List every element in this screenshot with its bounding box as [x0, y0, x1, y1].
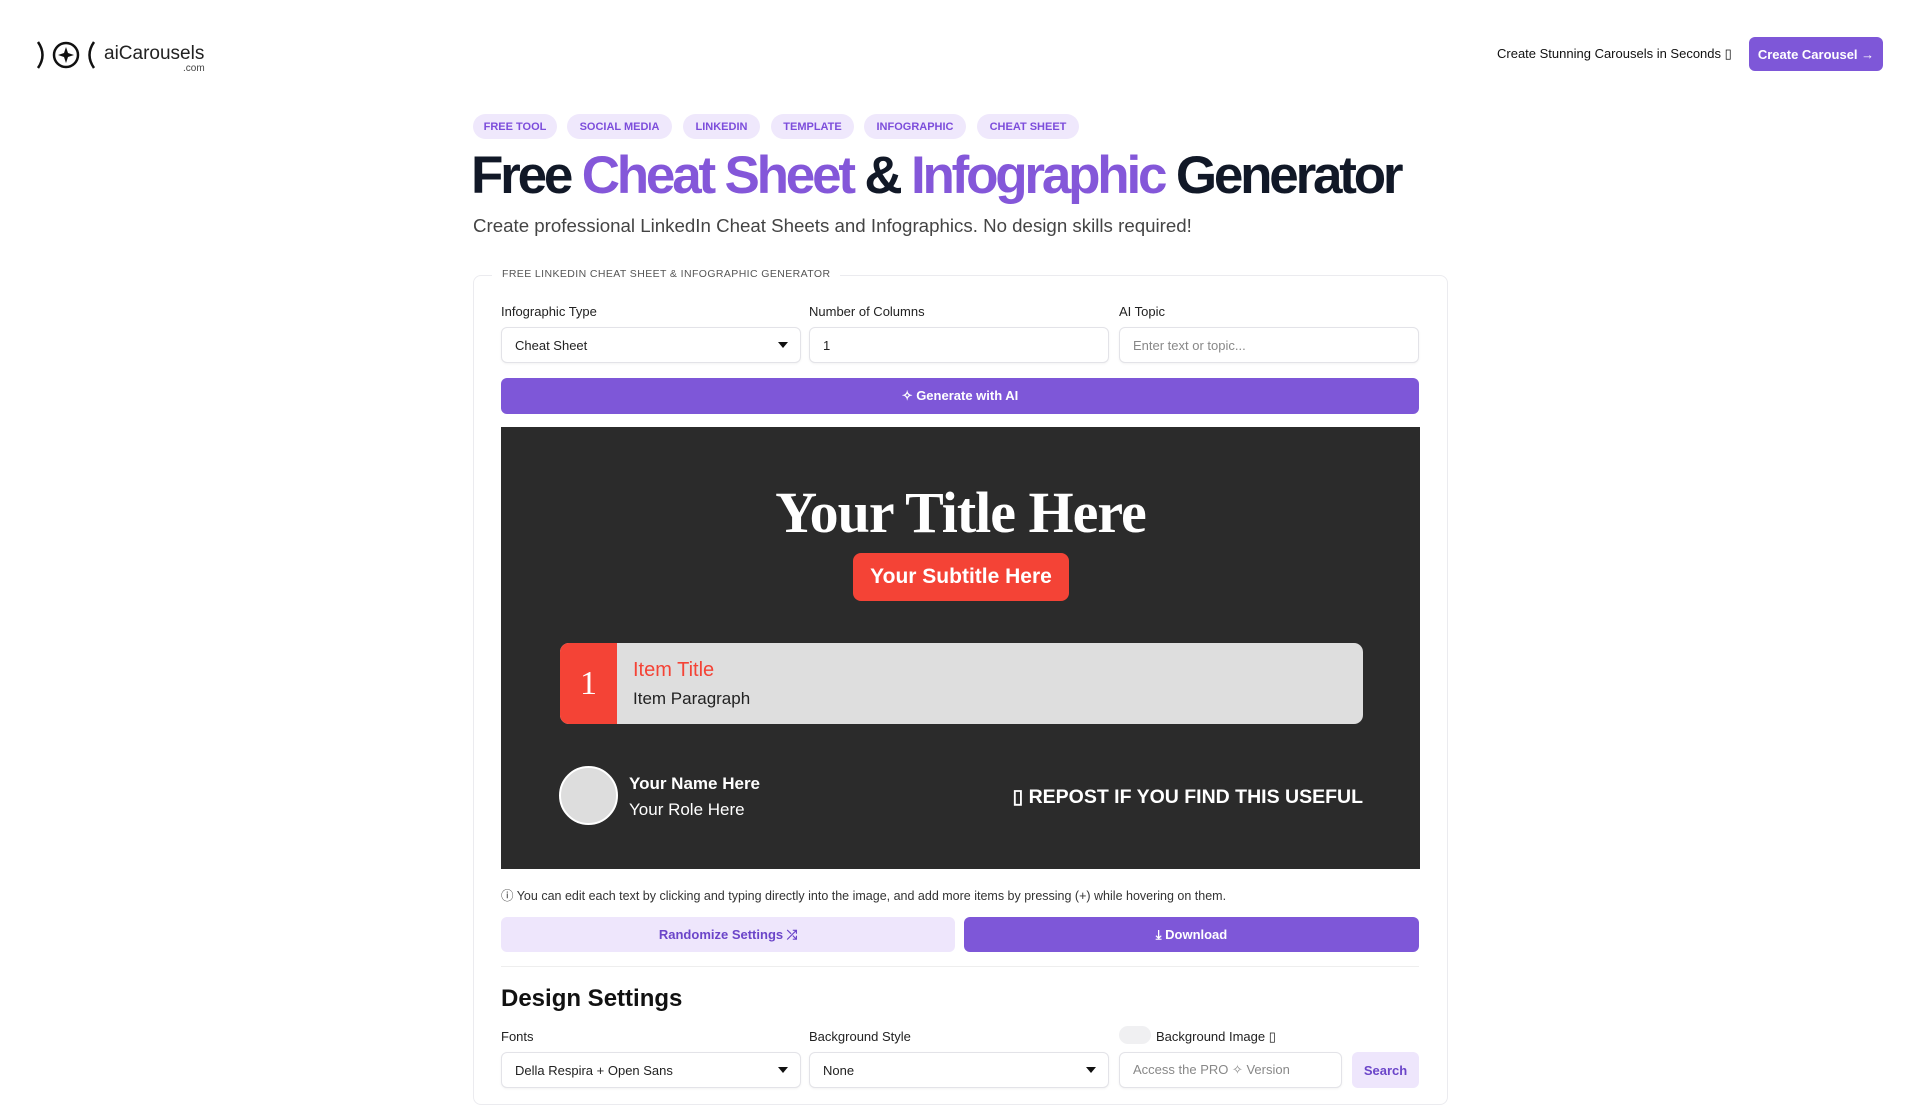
repost callout: ▯ REPOST IF YOU FIND THIS USEFUL	[1012, 786, 1363, 808]
design settings row: Search	[1364, 1062, 1407, 1078]
form row 1: Infographic Type	[501, 304, 597, 319]
form row 1: Cheat Sheet	[515, 338, 587, 352]
tags: TEMPLATE	[783, 120, 842, 132]
logo: aiCarousels	[104, 43, 204, 64]
download button: ⤓ Download	[1156, 926, 1227, 942]
tags: LINKEDIN	[696, 120, 747, 132]
design settings row: Background Style	[809, 1029, 911, 1044]
form row 1: Number of Columns	[809, 304, 925, 319]
tags: FREE TOOL	[484, 120, 546, 132]
logo: .com	[183, 63, 205, 74]
author	[559, 766, 760, 825]
item card	[560, 643, 1363, 724]
form row 1: AI Topic	[1119, 304, 1165, 319]
design settings heading: Design Settings	[501, 985, 682, 1012]
tags	[473, 114, 1079, 139]
generate button	[501, 378, 1419, 414]
design settings row: None	[823, 1062, 854, 1078]
infographic preview	[501, 427, 1420, 869]
logo	[37, 41, 205, 74]
design settings row: Della Respira + Open Sans	[515, 1062, 673, 1078]
form row 1: 1	[823, 338, 830, 352]
tags: CHEAT SHEET	[990, 120, 1066, 132]
download button	[964, 917, 1419, 952]
header button: Create Carousel →	[1758, 46, 1874, 62]
design settings row: Fonts	[501, 1029, 534, 1044]
info note: ⓘ You can edit each text by clicking and typing directly into the image, and add more items by pressing (+) while hovering on them.	[501, 889, 1226, 903]
form row 1: Enter text or topic...	[1133, 338, 1246, 352]
tags: INFOGRAPHIC	[876, 120, 954, 132]
panel: generator	[473, 275, 1448, 1105]
preview subtitle pill	[853, 553, 1069, 601]
design settings row: Background Image ▯	[1156, 1029, 1276, 1044]
author: Your Name Here	[629, 774, 760, 793]
legend: FREE LINKEDIN CHEAT SHEET & INFOGRAPHIC GENERATOR	[502, 268, 830, 280]
generate button: ✧ Generate with AI	[902, 388, 1018, 403]
form row 1	[501, 304, 1419, 364]
title: Free Cheat Sheet & Infographic Generator	[471, 146, 1400, 205]
design settings row	[501, 1026, 1419, 1088]
author: Your Role Here	[629, 800, 745, 819]
tags: SOCIAL MEDIA	[580, 120, 659, 132]
header button	[1749, 37, 1883, 71]
randomize button: Randomize Settings ⤮	[659, 926, 797, 942]
item card: 1	[580, 664, 597, 702]
subtitle: Create professional LinkedIn Cheat Sheets and Infographics. No design skills required!	[473, 215, 1192, 236]
header tagline: Create Stunning Carousels in Seconds ▯	[1497, 46, 1732, 61]
preview subtitle pill: Your Subtitle Here	[870, 565, 1052, 588]
randomize button	[501, 917, 955, 952]
preview title: Your Title Here	[775, 480, 1146, 545]
item card: Item Paragraph	[633, 689, 750, 708]
design settings row: Access the PRO ✧ Version	[1133, 1062, 1290, 1077]
item card: Item Title	[633, 659, 714, 681]
